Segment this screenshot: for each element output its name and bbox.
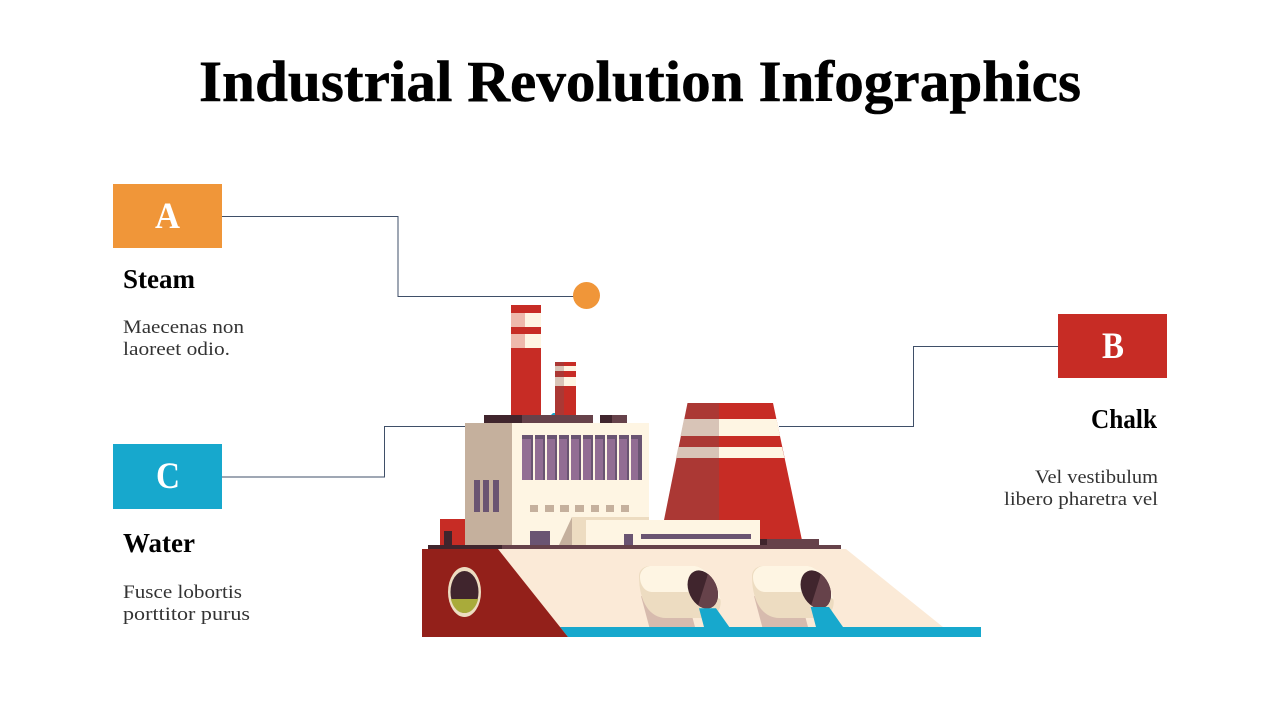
text block Chalk: Vel vestibulum xyxy=(1035,468,1159,488)
text block Steam: laoreet odio. xyxy=(123,340,230,360)
funnel xyxy=(659,403,803,545)
red side block xyxy=(440,519,465,545)
panel: C Water xyxy=(113,444,250,625)
porthole xyxy=(448,567,481,617)
lower cream block xyxy=(586,520,760,545)
ramp xyxy=(559,517,649,545)
icon: orange sun xyxy=(573,282,600,309)
label box C: C xyxy=(156,456,180,497)
text block Chalk: libero pharetra vel xyxy=(1004,490,1158,510)
drain pipe 2 xyxy=(752,565,843,627)
hull xyxy=(422,549,981,637)
text block Water xyxy=(123,583,250,625)
label box B: B xyxy=(1102,326,1124,367)
text block Steam: Maecenas non xyxy=(123,318,244,338)
label box A: A xyxy=(155,196,180,237)
door xyxy=(530,531,550,545)
label box C xyxy=(113,444,222,509)
label box B xyxy=(1058,314,1167,378)
main building xyxy=(465,423,649,545)
funnel base xyxy=(760,539,819,545)
text block Steam xyxy=(123,318,244,360)
small tan squares xyxy=(530,505,629,512)
deck xyxy=(428,545,841,549)
tall chimney xyxy=(511,305,541,415)
heading Chalk: Chalk xyxy=(1091,404,1157,434)
connector line: C to building xyxy=(222,426,465,477)
panel: A Steam xyxy=(113,184,244,360)
text block Chalk xyxy=(1004,468,1159,510)
text block Water: Fusce lobortis xyxy=(123,583,242,603)
label box A xyxy=(113,184,222,248)
factory ship illustration xyxy=(422,305,981,637)
heading Water: Water xyxy=(123,528,195,558)
connector line: B to funnel xyxy=(779,346,1058,426)
heading Steam: Steam xyxy=(123,264,196,294)
short chimney xyxy=(555,362,576,415)
drain pipe 1 xyxy=(639,565,729,627)
connector line: A to sun xyxy=(222,216,574,296)
roof xyxy=(484,415,627,423)
purple windows xyxy=(522,435,642,480)
tan wall windows xyxy=(474,480,499,512)
text block Water: porttitor purus xyxy=(123,605,250,625)
title: Industrial Revolution Infographics xyxy=(199,49,1081,114)
panel: B Chalk xyxy=(1004,314,1167,510)
